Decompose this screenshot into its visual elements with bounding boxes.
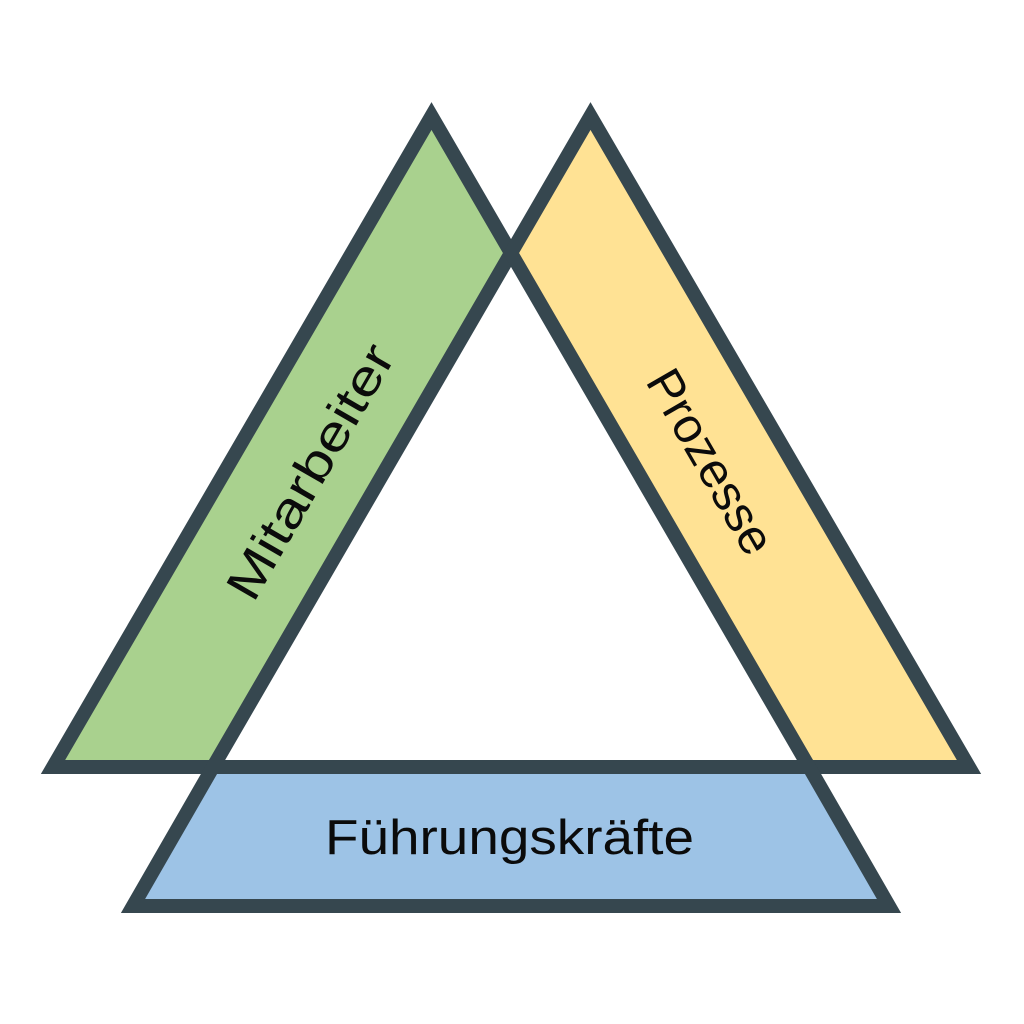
label: Führungskräfte: Führungskräfte bbox=[325, 811, 694, 865]
panel: Prozesse bbox=[511, 116, 969, 767]
label: Prozesse: Prozesse bbox=[635, 360, 785, 564]
label: Mitarbeiter: Mitarbeiter bbox=[216, 335, 406, 609]
panel: Führungskräfte bbox=[133, 767, 889, 906]
panel: Mitarbeiter bbox=[53, 116, 511, 767]
